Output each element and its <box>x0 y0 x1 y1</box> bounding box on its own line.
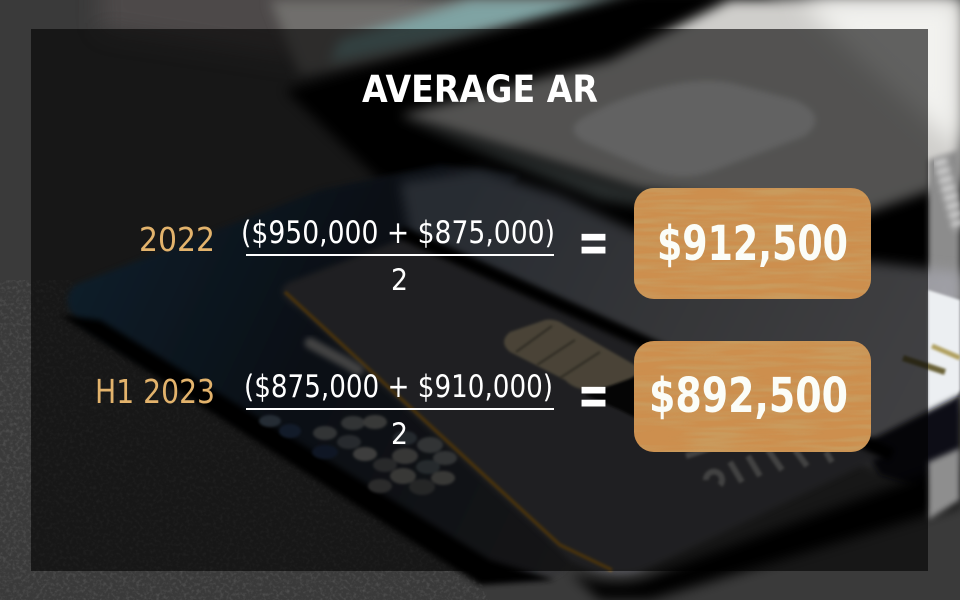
result badge H1 2023: $892,500 <box>649 368 848 424</box>
formula H1 2023: ($875,000 + $910,000) <box>244 369 553 405</box>
row: H1 2023 <box>95 341 871 452</box>
blue card <box>68 165 571 580</box>
formula H1 2023: 2 <box>391 417 408 451</box>
period label 2022: 2022 <box>139 220 215 259</box>
equals sign: = <box>578 208 610 276</box>
black card <box>282 236 885 575</box>
formula 2022: 2 <box>391 263 408 297</box>
formula 2022 <box>241 215 555 297</box>
formula H1 2023 <box>244 369 554 451</box>
title: AVERAGE AR <box>362 68 598 111</box>
embossed lettering marks <box>686 448 832 485</box>
chip <box>504 320 640 390</box>
card number dots <box>259 415 457 495</box>
result badge 2022: $912,500 <box>657 216 848 272</box>
result badge 2022 <box>634 188 871 299</box>
middle grey card <box>400 170 960 468</box>
result badge H1 2023 <box>634 341 871 452</box>
row: 2022 <box>139 188 871 299</box>
right card contacts <box>903 358 945 372</box>
formula 2022: ($950,000 + $875,000) <box>241 215 555 251</box>
period label H1 2023: H1 2023 <box>95 372 215 411</box>
equals sign: = <box>578 361 610 429</box>
